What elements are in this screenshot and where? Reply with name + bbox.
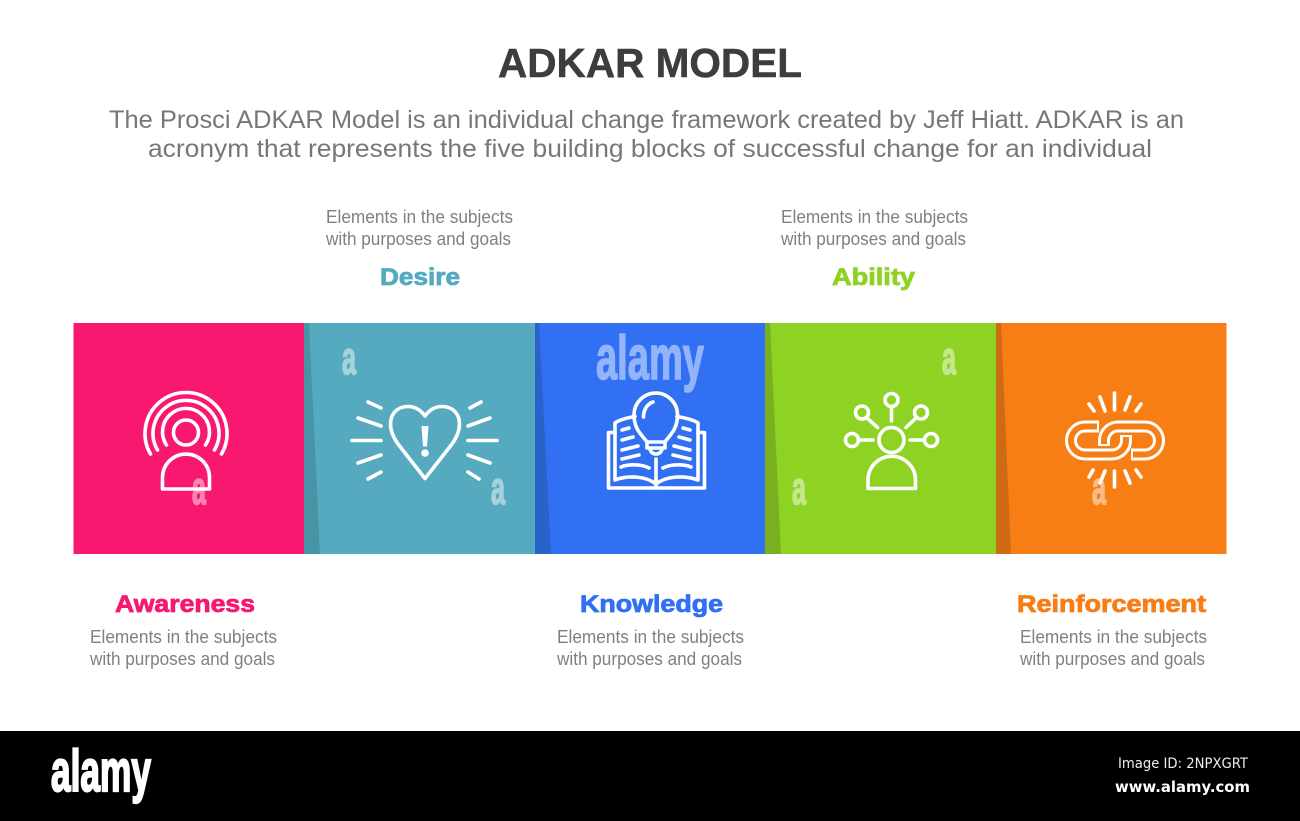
panel: ability: [765, 323, 996, 554]
watermark letter: a: [192, 462, 206, 514]
subtitle text block: [109, 106, 1184, 163]
label: desire: Elements in the subjects: [326, 207, 513, 227]
icon: heart with alert and rays: [352, 402, 497, 479]
label: knowledge: with purposes and goals: [556, 649, 742, 669]
watermark letter: a: [942, 332, 956, 384]
label: awareness: [89, 591, 277, 669]
label: desire: Desire: [380, 264, 460, 291]
label: ability: Elements in the subjects: [781, 207, 968, 227]
label: knowledge: Knowledge: [580, 591, 723, 618]
label: awareness: Elements in the subjects: [90, 627, 277, 647]
icon: chain link with rays: [1071, 393, 1159, 487]
icon: open book with light bulb: [608, 393, 704, 488]
panel: awareness: [74, 323, 304, 554]
watermark letter: a: [342, 332, 356, 384]
label: desire: with purposes and goals: [325, 229, 511, 249]
label: ability: with purposes and goals: [780, 229, 966, 249]
subtitle text block: The Prosci ADKAR Model is an individual change framework created by Jeff Hiatt. ADKAR is an: [109, 106, 1184, 134]
watermark letter: a: [792, 462, 806, 514]
image id: Image ID: 2NPXGRT: [1118, 756, 1248, 772]
panel: reinforcement: [996, 323, 1226, 554]
watermark letter: a: [1092, 462, 1106, 514]
panel: knowledge: [535, 323, 765, 554]
panel: desire: [304, 323, 535, 554]
icon: person with connected nodes: [846, 394, 938, 488]
label: ability: Ability: [832, 264, 916, 291]
label: reinforcement: Reinforcement: [1017, 591, 1206, 618]
website: www.alamy.com: [1115, 778, 1250, 796]
watermark letter: a: [491, 462, 505, 514]
icon: person with signal arcs: [145, 392, 227, 489]
label: reinforcement: [1017, 591, 1207, 669]
title: ADKAR MODEL: [498, 40, 802, 86]
label: reinforcement: with purposes and goals: [1019, 649, 1205, 669]
label: desire: [325, 207, 513, 291]
label: awareness: with purposes and goals: [89, 649, 275, 669]
label: awareness: Awareness: [115, 591, 255, 618]
footer logo: alamy: [51, 739, 151, 804]
label: reinforcement: Elements in the subjects: [1020, 627, 1207, 647]
label: knowledge: Elements in the subjects: [557, 627, 744, 647]
watermark logo: alamy: [596, 324, 704, 393]
subtitle text block: acronym that represents the five building blocks of successful change for an individual: [148, 135, 1152, 163]
label: ability: [780, 207, 968, 291]
footer bar: [0, 731, 1300, 821]
label: knowledge: [556, 591, 744, 669]
